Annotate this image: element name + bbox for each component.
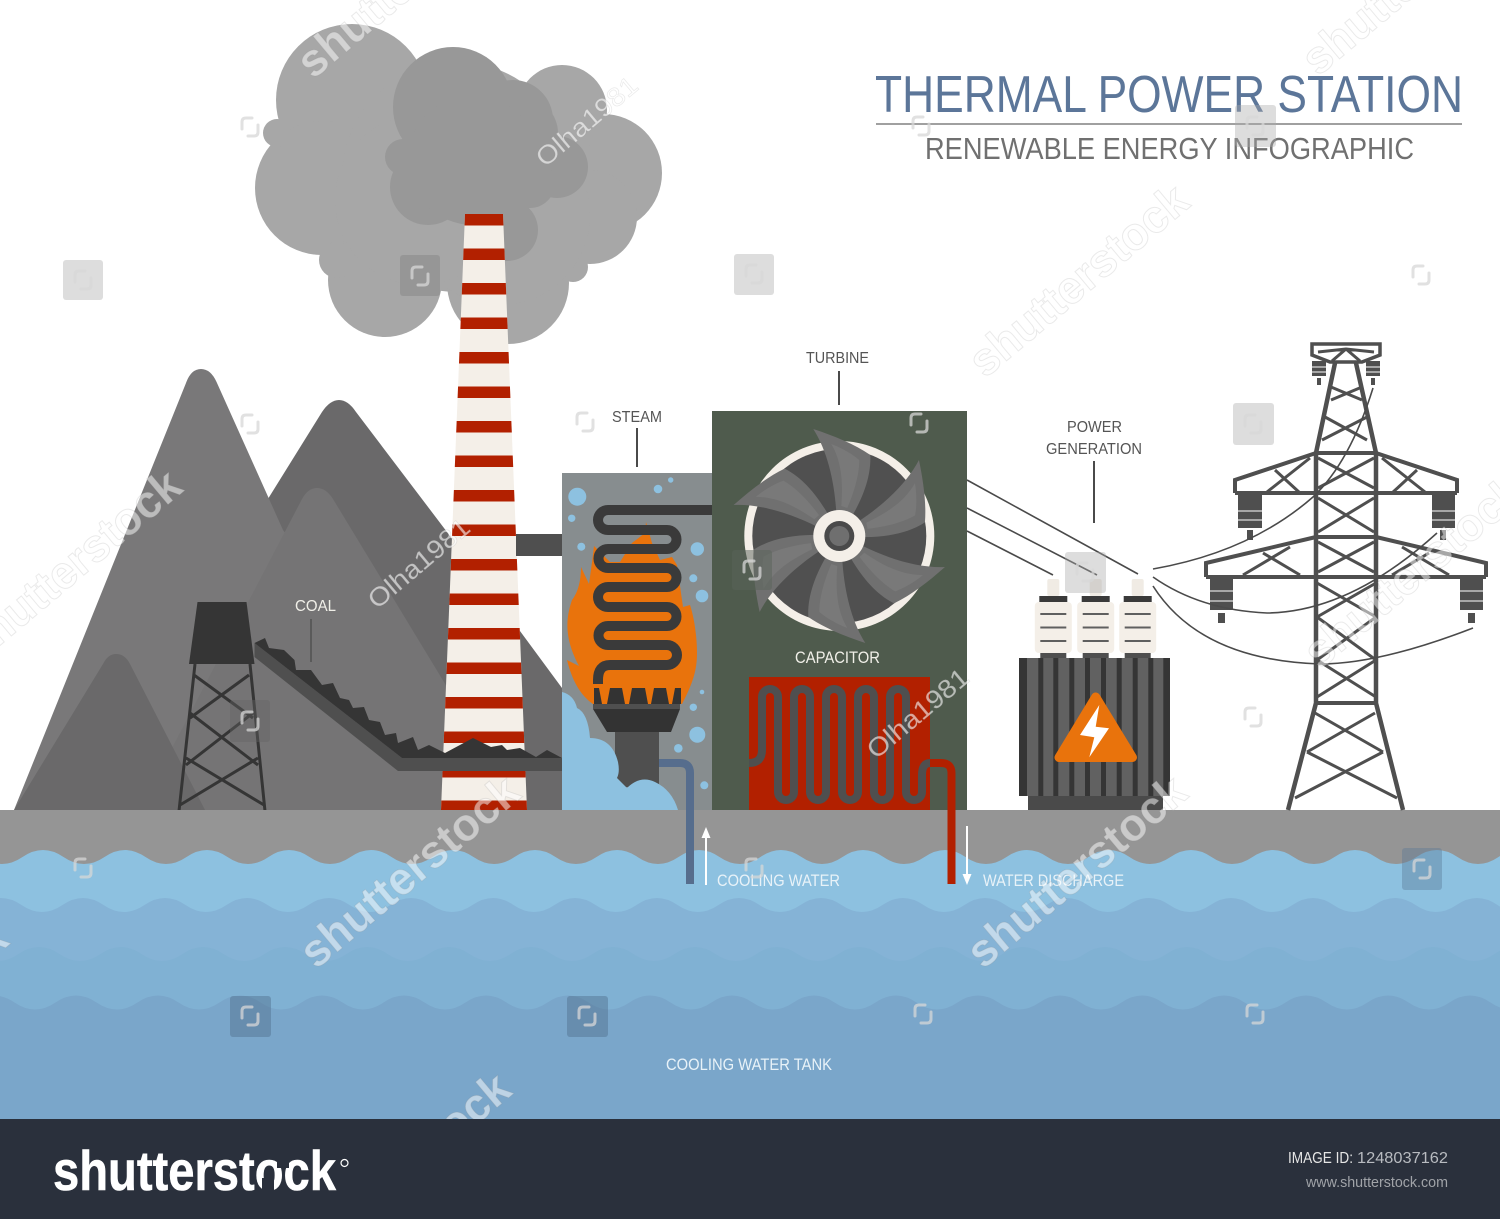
label: coal <box>295 598 336 662</box>
flame <box>567 522 697 704</box>
steam pipe between chimney and boiler <box>516 534 562 556</box>
arrow: water discharge down <box>962 826 972 885</box>
warning triangle <box>1059 697 1132 758</box>
watermarks: Olha1981 <box>861 662 975 765</box>
chimney with red stripes <box>441 214 527 810</box>
label: turbine: TURBINE <box>806 350 869 367</box>
label: capacitor: CAPACITOR <box>795 648 880 667</box>
lightning bolt <box>1080 705 1109 757</box>
steam coil <box>598 510 712 684</box>
image id: 1248037162 <box>1357 1150 1448 1167</box>
insulator left <box>1035 579 1072 658</box>
image id: IMAGE ID: <box>1288 1150 1353 1167</box>
watermarks: shutterstock <box>289 764 530 978</box>
boiler <box>562 473 712 810</box>
label: turbine <box>806 350 869 405</box>
label: steam: STEAM <box>612 409 662 426</box>
watermarks: shutterstock <box>956 764 1197 978</box>
footer logo: shutterstock <box>53 1139 337 1202</box>
pylon <box>1206 344 1486 810</box>
watermarks: shutterstock <box>958 173 1199 387</box>
capacitor coil panel <box>749 677 930 810</box>
label: water discharge: WATER DISCHARGE <box>983 871 1124 890</box>
power lines to pylon <box>1153 388 1473 664</box>
label: cooling water tank: COOLING WATER TANK <box>666 1055 833 1074</box>
watermarks: Olha1981 <box>362 512 476 615</box>
burner <box>593 688 681 787</box>
title block <box>875 66 1463 166</box>
wires from turbine to transformer <box>967 480 1138 575</box>
water discharge pipe <box>930 763 952 884</box>
pylon insulators <box>1210 361 1483 623</box>
footer bar <box>0 1119 1500 1219</box>
coal tower <box>179 602 265 811</box>
insulator right <box>1119 579 1156 658</box>
water bubbles <box>568 477 708 789</box>
label: power generation: GENERATION <box>1046 441 1142 458</box>
label: coal: COAL <box>295 598 336 615</box>
coal conveyor belt <box>254 638 562 771</box>
label: power generation: POWER <box>1067 419 1122 436</box>
label: power generation <box>1046 419 1142 523</box>
watermarks: Olha1981 <box>530 70 644 173</box>
turbine fan <box>731 429 948 643</box>
cooling water intake pipe <box>659 763 690 884</box>
water layers <box>0 850 1500 1119</box>
turbine housing <box>712 411 967 810</box>
insulator middle <box>1077 579 1114 658</box>
coal mountains <box>14 369 562 810</box>
label: cooling water: COOLING WATER <box>717 871 840 890</box>
transformer <box>1019 579 1170 810</box>
title block: RENEWABLE ENERGY INFOGRAPHIC <box>925 131 1414 166</box>
ground strip <box>0 810 1500 870</box>
label: steam <box>612 409 662 467</box>
website: www.shutterstock.com <box>1305 1174 1448 1191</box>
smoke cloud <box>255 24 662 344</box>
arrow: cooling water up <box>702 827 710 885</box>
cooling steam cloud <box>562 692 678 810</box>
